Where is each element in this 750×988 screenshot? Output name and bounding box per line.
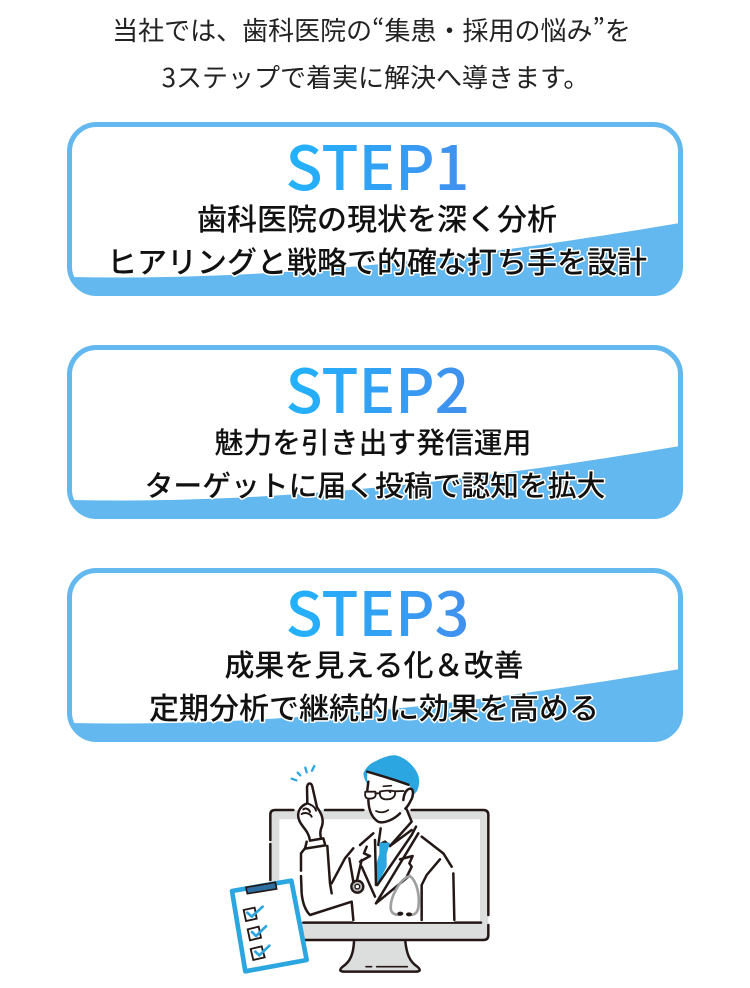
step 1 description: ヒアリングと戦略で的確な打ち手を設計: [107, 238, 647, 282]
step 1 description: [107, 195, 647, 282]
step 1 description: 歯科医院の現状を深く分析: [197, 195, 557, 239]
step 1 title: STEP1: [286, 119, 469, 208]
illustration: doctor on monitor with clipboard: [232, 755, 488, 972]
step 3 description: 定期分析で継続的に効果を高める: [149, 684, 599, 728]
intro heading: 当社では、歯科医院の“集患・採用の悩み”を: [112, 11, 631, 48]
sparkle marks: [292, 766, 314, 780]
clipboard: [232, 881, 307, 971]
doctor: [301, 755, 454, 922]
step 2 description: [145, 421, 605, 505]
coat sleeve: [301, 848, 353, 920]
glasses: [365, 791, 404, 799]
intro heading: 3ステップで着実に解決へ導きます。: [162, 58, 589, 95]
step 3 description: 成果を見える化＆改善: [224, 641, 524, 685]
intro heading: [112, 11, 631, 95]
step 3 title: STEP3: [286, 565, 469, 654]
pointing hand: [298, 783, 325, 849]
monitor: [270, 810, 488, 972]
step 2 description: ターゲットに届く投稿で認知を拡大: [145, 464, 605, 505]
panel: step 2: [70, 342, 680, 516]
tie: [376, 843, 390, 885]
step 2 title: STEP2: [286, 342, 469, 431]
panel: step 3: [70, 565, 680, 740]
hair: [363, 755, 419, 795]
panel: step 1: [70, 119, 680, 294]
step 3 description: [149, 641, 599, 728]
stethoscope: [351, 881, 363, 893]
step 2 description: 魅力を引き出す発信運用: [215, 421, 531, 462]
